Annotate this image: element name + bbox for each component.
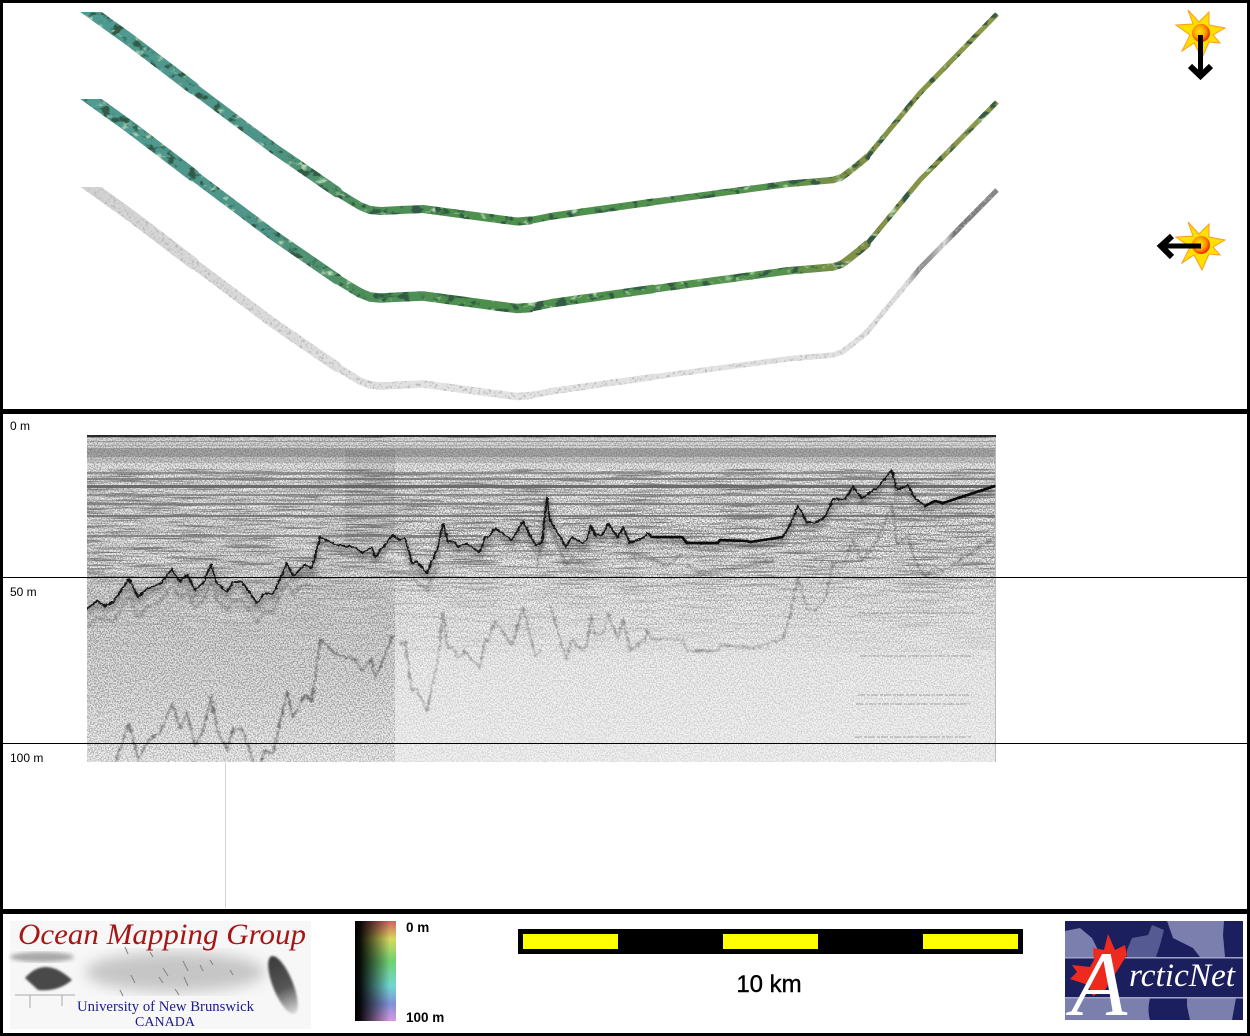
depth grid line: 100 m (3, 743, 1247, 744)
seabed primary echo (87, 470, 995, 609)
depth label: 0 m: 0 m (10, 419, 30, 433)
sub-bottom shadow beneath seabed (87, 520, 775, 627)
scale bar label: 10 km (736, 971, 802, 998)
panel: footer legend (10, 918, 1243, 1035)
panel: echogram water column (3, 419, 1247, 908)
seabed halo (87, 474, 995, 613)
depth grid line: 50 m (3, 577, 1247, 578)
scale bar (518, 929, 1023, 954)
legend label: 100 m: 100 m (406, 1010, 444, 1025)
legend: depth colour ramp (355, 921, 396, 1021)
faint horizontal streaks, lower right (855, 613, 974, 737)
logo: Ocean Mapping Group: CANADA (135, 1015, 196, 1030)
logo: Ocean Mapping Group: Ocean Mapping Group (18, 918, 306, 951)
logo: ArcticNet: A (1065, 933, 1128, 1035)
stray vertical line below echogram (224, 762, 226, 908)
depth label: 50 m: 50 m (10, 585, 37, 599)
track: backscatter greyscale (77, 177, 997, 396)
echogram image (87, 435, 996, 783)
logo: ArcticNet (1065, 921, 1243, 1035)
second seabed multiple, right (400, 505, 995, 711)
track: sunlit from east (77, 89, 997, 308)
panel: sun-illuminated survey tracks (77, 2, 1225, 396)
icon: sun with south arrow (1176, 10, 1225, 76)
depth label: 100 m: 100 m (10, 751, 43, 765)
second seabed multiple, left (114, 635, 396, 762)
legend label: 0 m: 0 m (406, 920, 429, 935)
track: sunlit from north (77, 2, 997, 222)
logo: Ocean Mapping Group: University of New Brunswick (77, 999, 254, 1015)
icon: sun with west arrow (1161, 222, 1225, 270)
logo: Ocean Mapping Group (10, 918, 311, 1030)
logo: ArcticNet: rcticNet (1129, 958, 1236, 994)
seabed flat thick section (652, 486, 995, 543)
